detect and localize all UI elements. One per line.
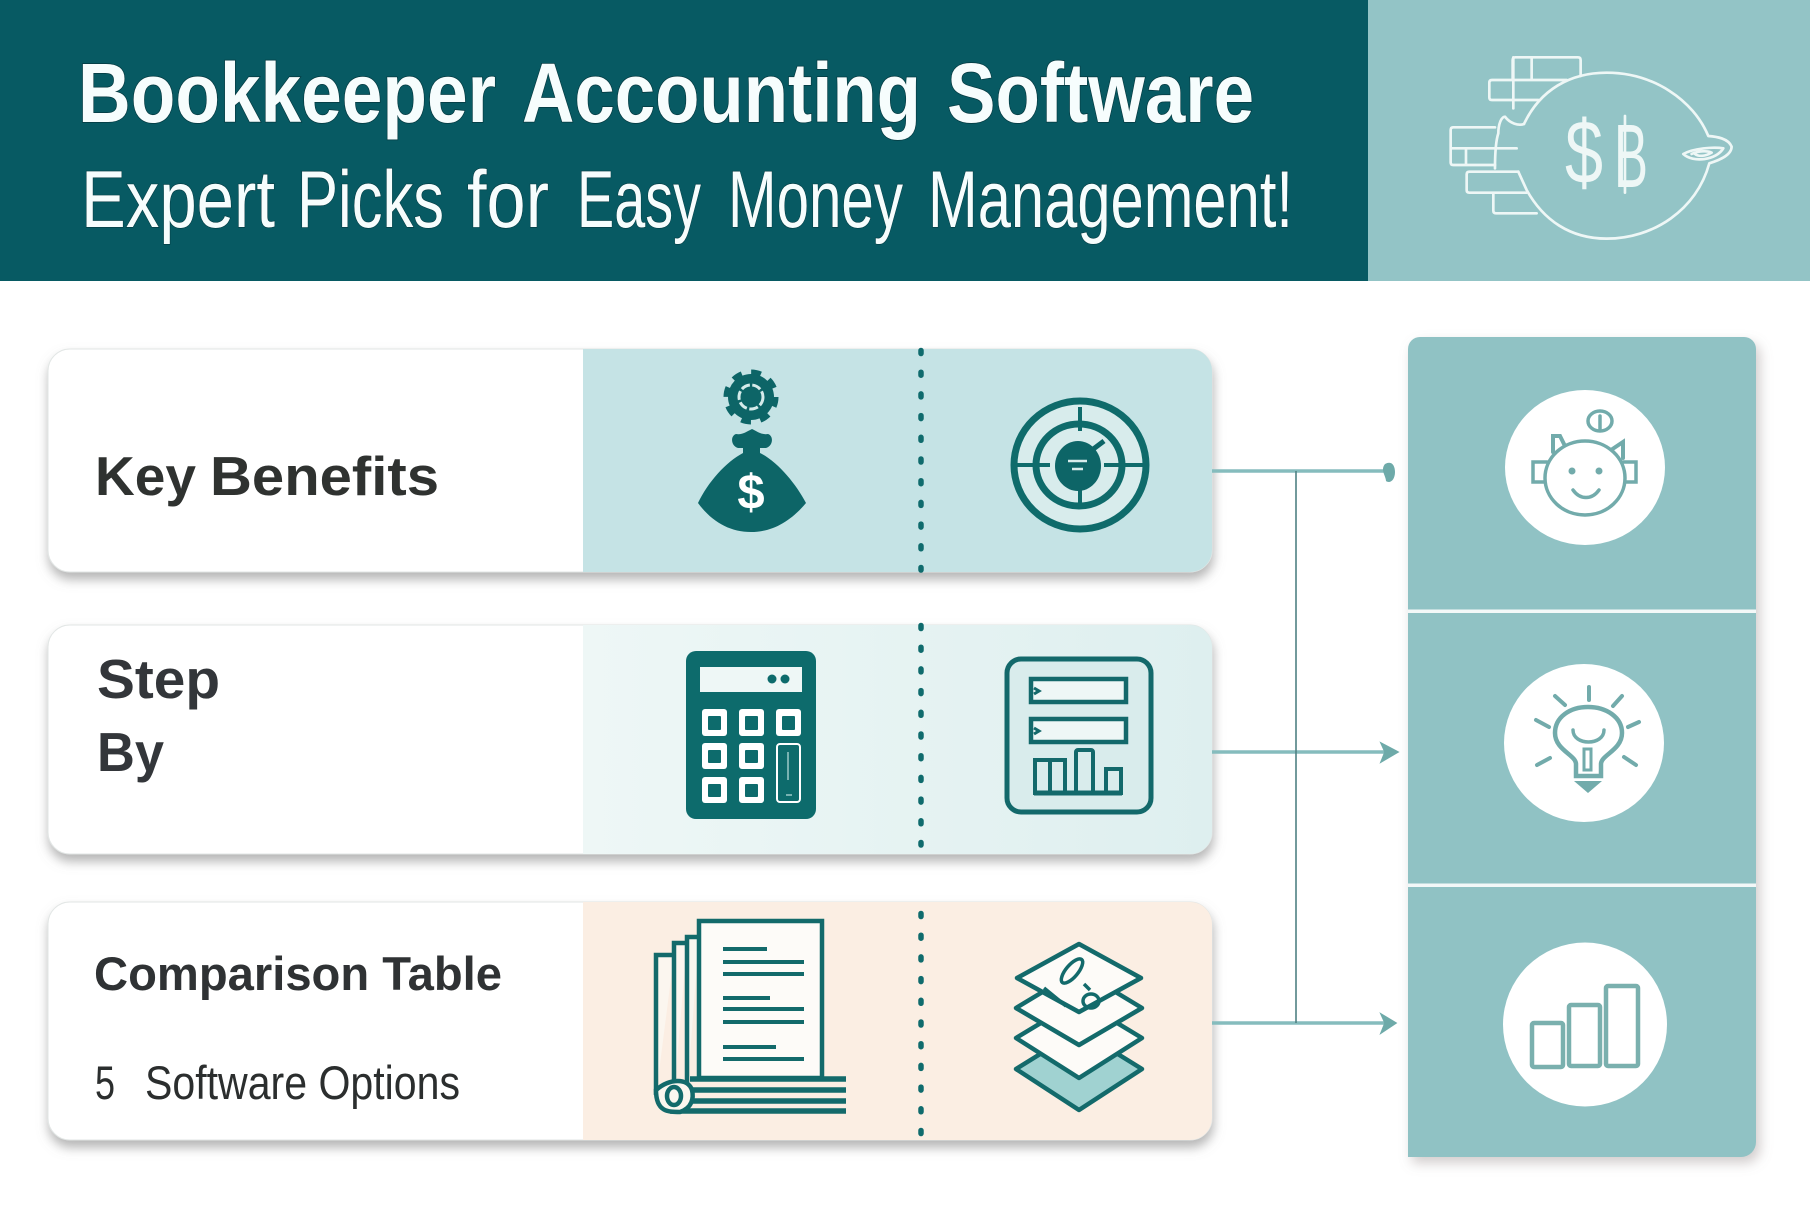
subtitle: Easy	[577, 155, 701, 245]
subtitle: Management!	[928, 155, 1293, 245]
panel: icon column	[1408, 337, 1756, 1157]
arrow: second	[1381, 743, 1398, 762]
icon: gear and money bag: $	[737, 466, 765, 520]
subtitle: Money	[728, 155, 903, 245]
title: Software	[947, 46, 1254, 140]
icon: target	[1014, 401, 1146, 529]
icon: stacked layers	[1016, 944, 1142, 1110]
subtitle	[81, 155, 1293, 245]
title	[78, 46, 1254, 140]
icon: gear and money bag	[698, 372, 806, 532]
icon: money bag with bricks	[1451, 57, 1732, 239]
icon: calculator	[686, 651, 816, 819]
header banner	[0, 0, 1810, 281]
text: software options: Software Options	[145, 1056, 460, 1109]
connector lines	[1212, 463, 1398, 1033]
arrow: first	[1383, 463, 1395, 482]
heading: comparison table: Comparison Table	[94, 947, 502, 1000]
heading: step by	[97, 648, 220, 783]
heading: key benefits	[95, 445, 439, 507]
subtitle: for	[467, 155, 549, 245]
title: Accounting	[522, 46, 921, 140]
heading: key benefits: Key	[95, 445, 196, 507]
text: software options: 5	[95, 1056, 115, 1109]
arrow: third	[1381, 1014, 1396, 1033]
panel: key benefits	[48, 349, 1212, 572]
heading: step by: Step	[97, 648, 220, 710]
panel: step by	[48, 625, 1212, 854]
icon: money bag with bricks: B	[1614, 107, 1648, 207]
icon: report with bars	[1007, 659, 1151, 812]
subtitle: Expert	[81, 155, 275, 245]
title: Bookkeeper	[78, 46, 496, 140]
heading: step by: By	[97, 721, 164, 783]
icon: light bulb	[1504, 664, 1664, 822]
icon: money bag with bricks: $	[1565, 103, 1603, 203]
icon: bar chart	[1503, 942, 1667, 1106]
icon: document stack	[656, 921, 846, 1112]
heading: key benefits: Benefits	[210, 445, 439, 507]
subtitle: Picks	[297, 155, 444, 245]
icon: smiling face	[1505, 390, 1665, 545]
panel: comparison table	[48, 902, 1212, 1140]
